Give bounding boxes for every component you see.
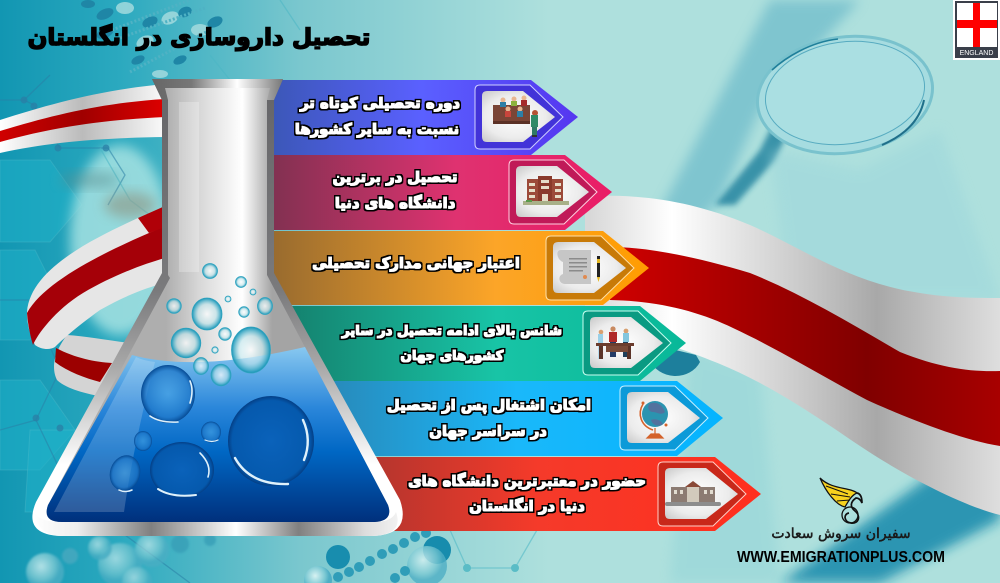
flag: England: ENGLAND [960, 50, 993, 57]
website: WWW.EMIGRATIONPLUS.COM [737, 549, 945, 566]
text 5 [387, 397, 591, 440]
text 6: دنیا در انگلستان [469, 497, 585, 515]
logo: Sofiran Soroush Saadat [737, 478, 945, 566]
icon card 4: team at table [583, 311, 671, 375]
text 2 [333, 169, 457, 212]
logo name: سفیران سروش سعادت [771, 526, 911, 542]
band 4 arrow [265, 306, 686, 381]
panel 1: shorter study period [265, 80, 578, 155]
ribbon: right white and red band [585, 196, 1000, 515]
band 6 arrow [265, 457, 761, 531]
bubbles in liquid [105, 365, 314, 498]
panel 4: continue study abroad [265, 306, 686, 381]
icon card 3: certificate [546, 236, 634, 300]
text 4: شانس بالای ادامه تحصیل در سایر [341, 324, 562, 339]
text 1: نسبت به سایر کشورها [295, 121, 459, 138]
molecule strand [81, 0, 224, 78]
text 2: تحصیل در برترین [333, 169, 457, 186]
band 3 arrow [265, 231, 649, 305]
flask glass body [32, 79, 403, 536]
text 6 [408, 472, 646, 515]
teal tubes behind [650, 0, 860, 230]
flask [32, 79, 403, 536]
icon card 2: university [509, 160, 597, 224]
band 2 arrow [265, 155, 612, 230]
panel 2: top universities [265, 155, 612, 230]
icon card 6: university building [658, 462, 746, 526]
icon card 1: classroom [475, 85, 563, 149]
title: تحصیل داروسازی در انگلستان [28, 23, 370, 51]
band 1 arrow [265, 80, 578, 155]
band 5 arrow [265, 381, 723, 456]
text 5: در سراسر جهان [429, 423, 547, 440]
text 4: کشورهای جهان [400, 349, 504, 364]
text 3: اعتبار جهانی مدارک تحصیلی [312, 255, 520, 272]
text 1 [295, 95, 460, 138]
text 5: امکان اشتغال پس از تحصیل [387, 397, 591, 414]
text 6: حضور در معتبرترین دانشگاه های [408, 472, 646, 490]
bubbles above liquid [167, 264, 272, 386]
bottom molecules [26, 528, 451, 583]
flag: England [953, 0, 1000, 60]
ribbon: left lower curl [27, 206, 165, 397]
blue liquid [47, 347, 389, 522]
ribbon: left upper band [0, 84, 165, 153]
text 2: دانشگاه های دنیا [335, 194, 456, 212]
text 1: دوره تحصیلی کوتاه تر [299, 95, 460, 112]
panel 5: job opportunities worldwide [265, 381, 723, 456]
panel 6: most prestigious universities [265, 457, 761, 531]
text 4 [341, 324, 562, 364]
logo bird icon [820, 478, 862, 523]
panel 3: global credentials [265, 231, 649, 305]
icon card 5: globe [620, 386, 708, 450]
